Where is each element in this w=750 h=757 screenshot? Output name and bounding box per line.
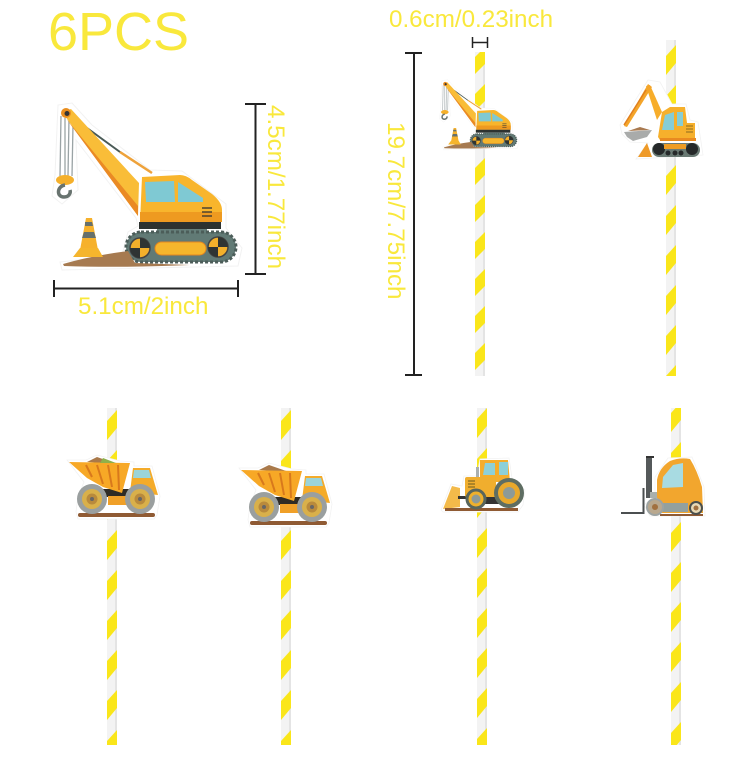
icon: small crane (439, 80, 519, 150)
dimension: crane height (245, 104, 266, 274)
icon: forklift (621, 456, 705, 516)
width bracket (472, 37, 488, 48)
icon: dump truck (239, 463, 332, 527)
straw 4 with dump truck (239, 408, 332, 745)
dimension: straw height (405, 53, 422, 375)
icon: large crane topper (52, 103, 242, 270)
label: straw height: 19.7cm/7.75inch (382, 122, 409, 300)
icon: bulldozer (441, 458, 525, 512)
label: crane width: 5.1cm/2inch (78, 293, 208, 320)
label: crane height: 4.5cm/1.77inch (262, 105, 289, 269)
straw 5 with bulldozer (441, 408, 525, 745)
straw 1 with crane topper (439, 52, 519, 376)
title: 6PCS: 6PCS (48, 2, 189, 62)
icon: excavator (620, 80, 703, 159)
icon: dump truck (67, 455, 160, 519)
straw width label: 0.6cm/0.23inch (389, 6, 553, 33)
straw 6 with forklift (621, 408, 705, 745)
straw 2 with excavator topper (620, 40, 703, 376)
straw 3 with dump truck (67, 408, 160, 745)
dimension: crane width (54, 280, 238, 297)
